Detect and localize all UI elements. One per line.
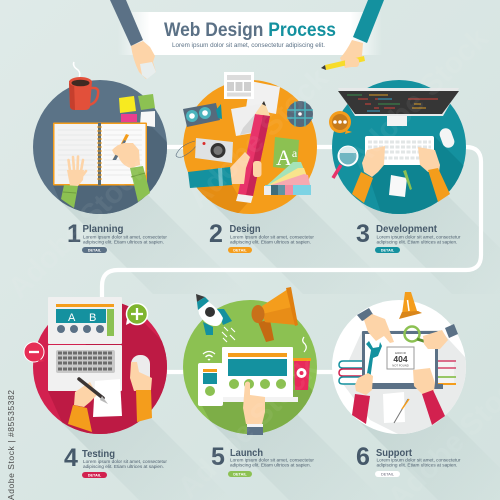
icon: minus bubble bbox=[24, 342, 45, 362]
step 2 label: Design bbox=[230, 223, 260, 235]
step 3 label bbox=[356, 220, 461, 253]
circle bbox=[33, 80, 167, 214]
step 3 label: 3 bbox=[356, 220, 370, 248]
circle bbox=[183, 80, 317, 214]
magnifier hand bbox=[404, 324, 458, 349]
pointing hand bbox=[243, 382, 265, 435]
panel: support bbox=[332, 292, 466, 434]
process connector line bbox=[102, 147, 481, 372]
step 6 label: Support bbox=[376, 447, 412, 459]
circle shadow bbox=[202, 376, 313, 434]
icon: laptop: A bbox=[68, 312, 76, 324]
step 5 label: DETAIL bbox=[233, 472, 247, 476]
icon: photo camera bbox=[176, 138, 233, 163]
step 2 label: adipiscing elit. Etiam ultrices at sapien. bbox=[230, 240, 311, 244]
circle bbox=[332, 80, 466, 214]
step 4 label: DETAIL bbox=[88, 473, 102, 477]
step 4 label: Lorem ipsum dolor sit amet, consectetur bbox=[83, 459, 167, 464]
circle bbox=[332, 300, 466, 434]
circle shadow bbox=[196, 185, 248, 213]
step 1 label bbox=[67, 220, 167, 253]
icon: traffic cone bbox=[399, 292, 422, 319]
icon: coffee mug bbox=[69, 62, 98, 110]
icon: books bbox=[339, 361, 456, 384]
mouse hand bbox=[130, 355, 152, 422]
step 6 label: 6 bbox=[356, 443, 370, 471]
watermark: Adobe Stock bbox=[182, 62, 335, 215]
step 1 label: adipiscing elit. Etiam ultrices at sapien. bbox=[83, 240, 164, 244]
icon: monitor bbox=[338, 88, 459, 126]
step 3 label: adipiscing elit. Etiam ultrices at sapien. bbox=[376, 240, 458, 244]
panel: testing bbox=[24, 297, 167, 434]
right hand with pencil bbox=[321, 0, 384, 70]
phone bbox=[198, 363, 223, 406]
writing hand bbox=[68, 379, 108, 432]
left hand bbox=[61, 156, 86, 208]
wireframe sheets bbox=[224, 72, 280, 136]
icon: typography card bbox=[273, 137, 299, 170]
step 2 label: Lorem ipsum dolor sit amet, consectetur bbox=[230, 234, 314, 240]
step 4 label: 4 bbox=[64, 444, 78, 472]
long shadows behind circles bbox=[53, 100, 500, 500]
icon: mouse bbox=[438, 127, 456, 149]
icon: pencil bbox=[236, 101, 270, 203]
step 5 label: Launch bbox=[230, 447, 263, 459]
icon: globe bbox=[287, 101, 313, 127]
subtitle: Lorem ipsum dolor sit amet, consectetur adipiscing elit. bbox=[172, 42, 325, 49]
step 5 label: Lorem ipsum dolor sit amet, consectetur bbox=[230, 458, 314, 462]
circle bbox=[183, 300, 317, 434]
step 1 label: Lorem ipsum dolor sit amet, consectetur bbox=[83, 234, 167, 240]
coffee cup bbox=[293, 337, 311, 390]
icon: laptop bbox=[362, 331, 443, 389]
circle shadow bbox=[344, 330, 466, 434]
error box: ERROR bbox=[395, 351, 407, 355]
step 2 label bbox=[209, 220, 314, 253]
arm and hand bbox=[188, 152, 262, 188]
step 6 label: Lorem ipsum dolor sit amet, consectetur bbox=[376, 458, 461, 462]
header banner bbox=[118, 12, 382, 55]
panel: planning bbox=[33, 62, 167, 214]
step 5 label: adipiscing elit. Etiam ultrices at sapien. bbox=[230, 462, 311, 468]
panel: design bbox=[176, 72, 317, 225]
icon: magnifier bbox=[333, 146, 358, 178]
step 5 label bbox=[211, 443, 314, 477]
stock id: Adobe Stock | #85535382 bbox=[6, 390, 16, 500]
step 2 label: 2 bbox=[209, 220, 223, 248]
icon: typography card: A bbox=[276, 145, 292, 170]
step 1 label: DETAIL bbox=[88, 248, 102, 252]
step 3 label: DETAIL bbox=[381, 248, 395, 252]
icon: video camera bbox=[183, 103, 222, 127]
circle bbox=[33, 300, 167, 434]
step 6 label bbox=[356, 443, 461, 477]
sticky notes bbox=[119, 94, 155, 127]
icon: typography card: a bbox=[292, 146, 298, 160]
step 4 label: Testing bbox=[82, 448, 115, 460]
wrench hand bbox=[352, 341, 382, 424]
icon: laptop bbox=[48, 297, 122, 391]
icon: megaphone bbox=[252, 287, 298, 342]
icon: plus bubble bbox=[126, 304, 148, 325]
step 4 label: adipiscing elit. Etiam ultrices at sapien. bbox=[83, 464, 164, 469]
step 5 label: 5 bbox=[211, 443, 225, 471]
step 6 label: adipiscing elit. Etiam ultrices at sapien. bbox=[376, 462, 458, 468]
pointing hand bbox=[357, 308, 394, 343]
icon: laptop: B bbox=[89, 312, 96, 324]
left hand on mouse bbox=[110, 0, 156, 79]
notepad and pen bbox=[383, 392, 409, 423]
step 3 label: Development bbox=[376, 223, 437, 235]
watermark: Adobe Stock bbox=[2, 152, 155, 305]
error box: 404 bbox=[393, 354, 408, 364]
step 6 label: DETAIL bbox=[381, 472, 394, 476]
step 3 label: Lorem ipsum dolor sit amet, consectetur bbox=[376, 234, 461, 240]
typing hands bbox=[352, 146, 450, 203]
icon: wifi bbox=[203, 352, 215, 360]
watermark: Adobe Stock bbox=[342, 22, 495, 175]
icon: colour swatches bbox=[264, 162, 311, 195]
error box bbox=[387, 347, 414, 369]
right hand bbox=[413, 368, 445, 425]
notepad bbox=[93, 379, 122, 417]
paper and pen bbox=[389, 170, 412, 197]
step 4 label bbox=[64, 444, 167, 478]
notebook bbox=[53, 122, 147, 186]
right hand with pen bbox=[112, 134, 150, 202]
circle shadow bbox=[48, 304, 167, 434]
circle shadow bbox=[54, 126, 167, 214]
panel: development bbox=[329, 80, 466, 214]
circle shadow bbox=[368, 136, 464, 214]
icon: rocket bbox=[196, 294, 235, 342]
step 2 label: DETAIL bbox=[233, 248, 247, 252]
panel: launch bbox=[183, 287, 317, 435]
step 1 label: 1 bbox=[67, 220, 81, 248]
icon: keyboard bbox=[365, 136, 434, 165]
step 1 label: Planning bbox=[82, 223, 124, 235]
website monitor bbox=[222, 347, 298, 402]
icon: chat bubble bbox=[329, 111, 352, 134]
error box: NOT FOUND bbox=[392, 364, 409, 368]
title: Web Design Process bbox=[164, 19, 336, 41]
